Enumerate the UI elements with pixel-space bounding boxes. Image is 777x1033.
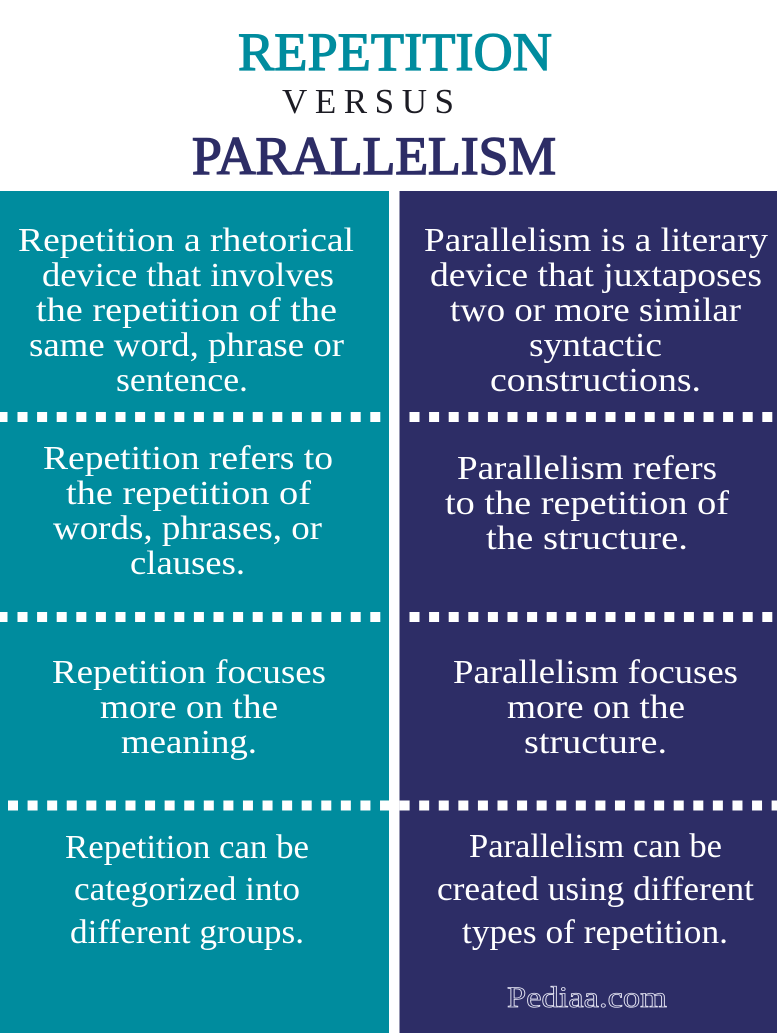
text: repetition refers: clauses. — [130, 545, 245, 582]
text: parallelism focus: more on the — [507, 689, 685, 726]
text: repetition refers: words, phrases, or — [53, 510, 323, 547]
heading: parallelism: PARALLELISM — [192, 126, 556, 186]
text: parallelism refers: Parallelism refers — [457, 450, 717, 487]
text: repetition refers: Repetition refers to — [43, 440, 333, 477]
text: parallelism definition — [424, 222, 768, 399]
text: parallelism types — [437, 828, 755, 951]
text: parallelism refers: the structure. — [486, 520, 688, 557]
divider row 1 — [0, 412, 773, 422]
divider row 2 — [0, 612, 773, 622]
text: repetition focus: meaning. — [121, 724, 257, 761]
text: repetition categories: Repetition can be — [65, 829, 309, 866]
text: repetition definition: Repetition a rhetorical — [18, 222, 354, 259]
text: repetition categories — [65, 829, 309, 951]
text: parallelism refers — [445, 450, 730, 557]
text: parallelism definition: Parallelism is a literary — [424, 222, 768, 259]
text: repetition definition: sentence. — [116, 362, 248, 399]
text: parallelism definition: syntactic — [529, 327, 662, 364]
text: repetition focus: more on the — [100, 689, 278, 726]
text: parallelism focus: structure. — [524, 724, 667, 761]
text: parallelism focus: Parallelism focuses — [453, 654, 738, 691]
text: repetition refers: the repetition of — [66, 475, 312, 512]
text: parallelism refers: to the repetition of — [445, 485, 730, 522]
text: parallelism definition: device that juxtaposes — [430, 257, 762, 294]
text: repetition definition: device that involves — [42, 257, 334, 294]
text: repetition definition — [18, 222, 354, 399]
text: repetition definition: same word, phrase or — [29, 327, 345, 364]
text: repetition definition: the repetition of the — [36, 292, 337, 329]
text: repetition categories: categorized into — [74, 871, 300, 908]
heading: repetition: REPETITION — [238, 22, 552, 82]
text: repetition focus — [52, 654, 326, 761]
text: parallelism types: created using different — [437, 871, 755, 908]
heading: versus: VERSUS — [282, 82, 454, 121]
divider row 3 — [8, 800, 777, 810]
text: parallelism definition: two or more similar — [450, 292, 742, 329]
text: parallelism types: Parallelism can be — [469, 828, 722, 865]
text: repetition focus: Repetition focuses — [52, 654, 326, 691]
logo: Pediaa.com: Pediaa.com — [507, 981, 667, 1014]
text: parallelism focus — [453, 654, 738, 761]
text: repetition categories: different groups. — [70, 914, 304, 951]
title — [192, 22, 556, 186]
text: parallelism definition: constructions. — [490, 362, 701, 399]
text: repetition refers — [43, 440, 333, 582]
panel: repetition column — [0, 191, 389, 1033]
text: parallelism types: types of repetition. — [462, 914, 728, 951]
panel: parallelism column — [400, 191, 777, 1033]
